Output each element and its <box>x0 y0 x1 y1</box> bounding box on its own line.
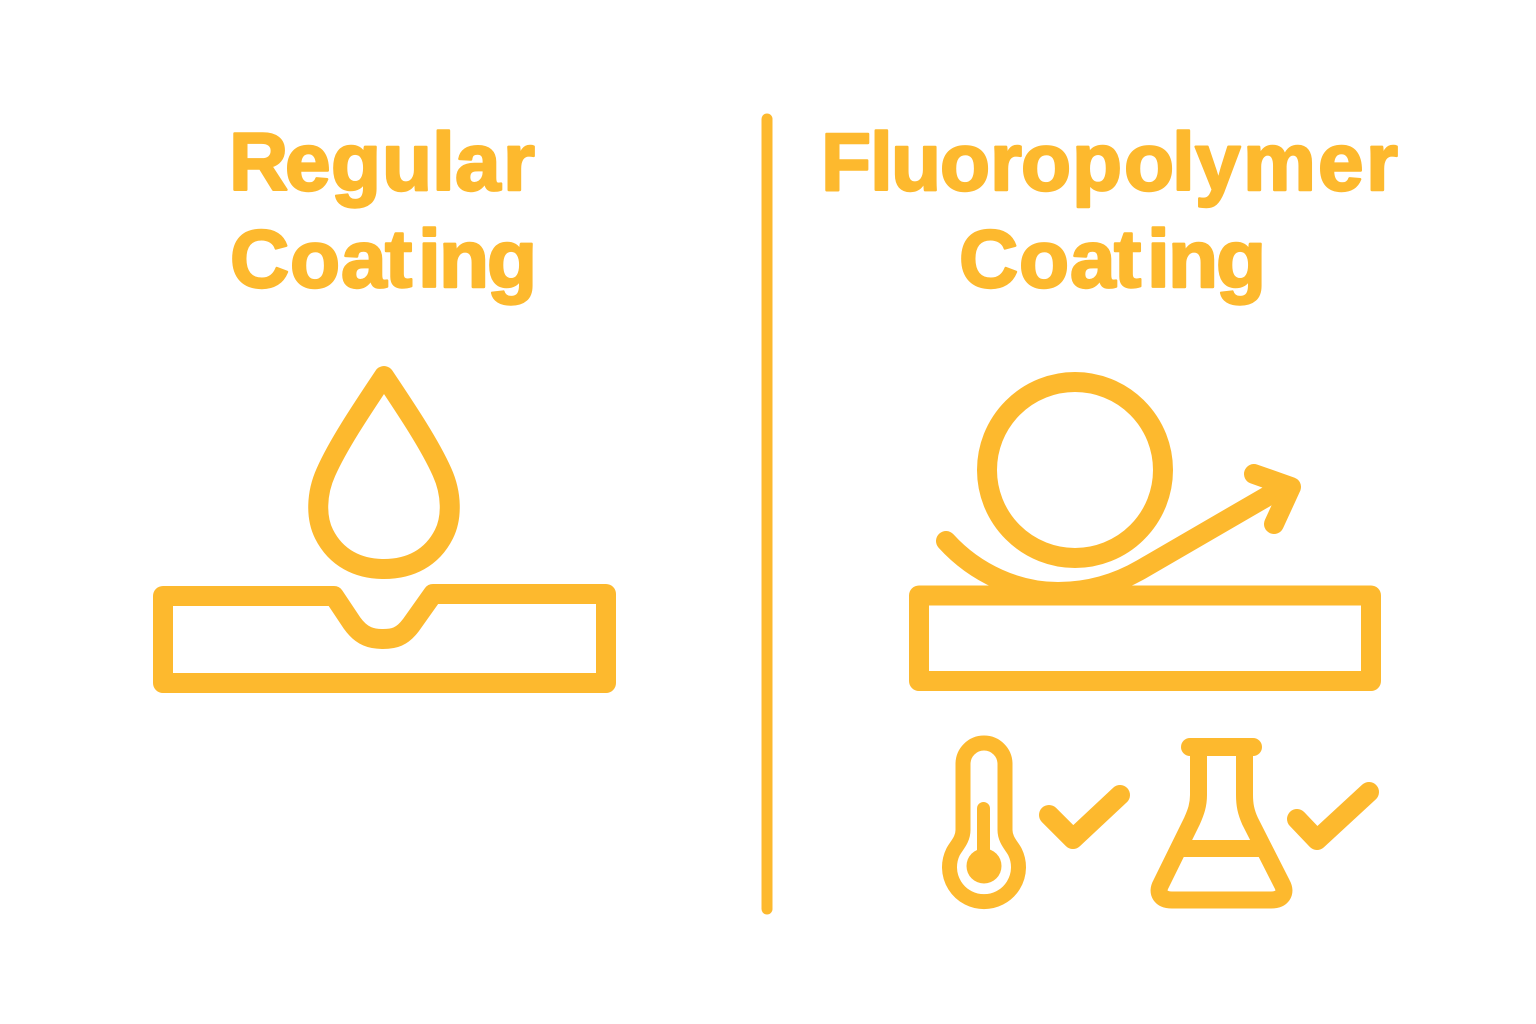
heading: Regular Coating <box>229 117 537 305</box>
icon: flat surface <box>919 596 1371 681</box>
flask liquid line <box>1180 840 1263 857</box>
icon: flask <box>1159 747 1284 900</box>
heading: Regular Coating: Regular <box>229 117 535 208</box>
icon: rolling ball with arrow <box>946 382 1291 592</box>
icon: check mark 1 <box>1049 795 1120 839</box>
thermometer mercury <box>977 808 990 866</box>
icon: thermometer <box>949 743 1018 902</box>
icon: check mark 2 <box>1297 792 1369 840</box>
arrow head <box>1254 474 1291 524</box>
icon: dented surface <box>163 594 606 683</box>
icon: water drop <box>318 376 450 569</box>
heading: Fluoropolymer Coating <box>821 117 1398 305</box>
arrow path <box>946 486 1285 592</box>
heading: Fluoropolymer Coating: Fluoropolymer <box>821 117 1398 208</box>
flask rim <box>1190 738 1253 756</box>
ball <box>987 382 1163 558</box>
divider line <box>762 119 772 909</box>
heading: Regular Coating: Coating <box>230 214 537 305</box>
heading: Fluoropolymer Coating: Coating <box>959 214 1266 305</box>
